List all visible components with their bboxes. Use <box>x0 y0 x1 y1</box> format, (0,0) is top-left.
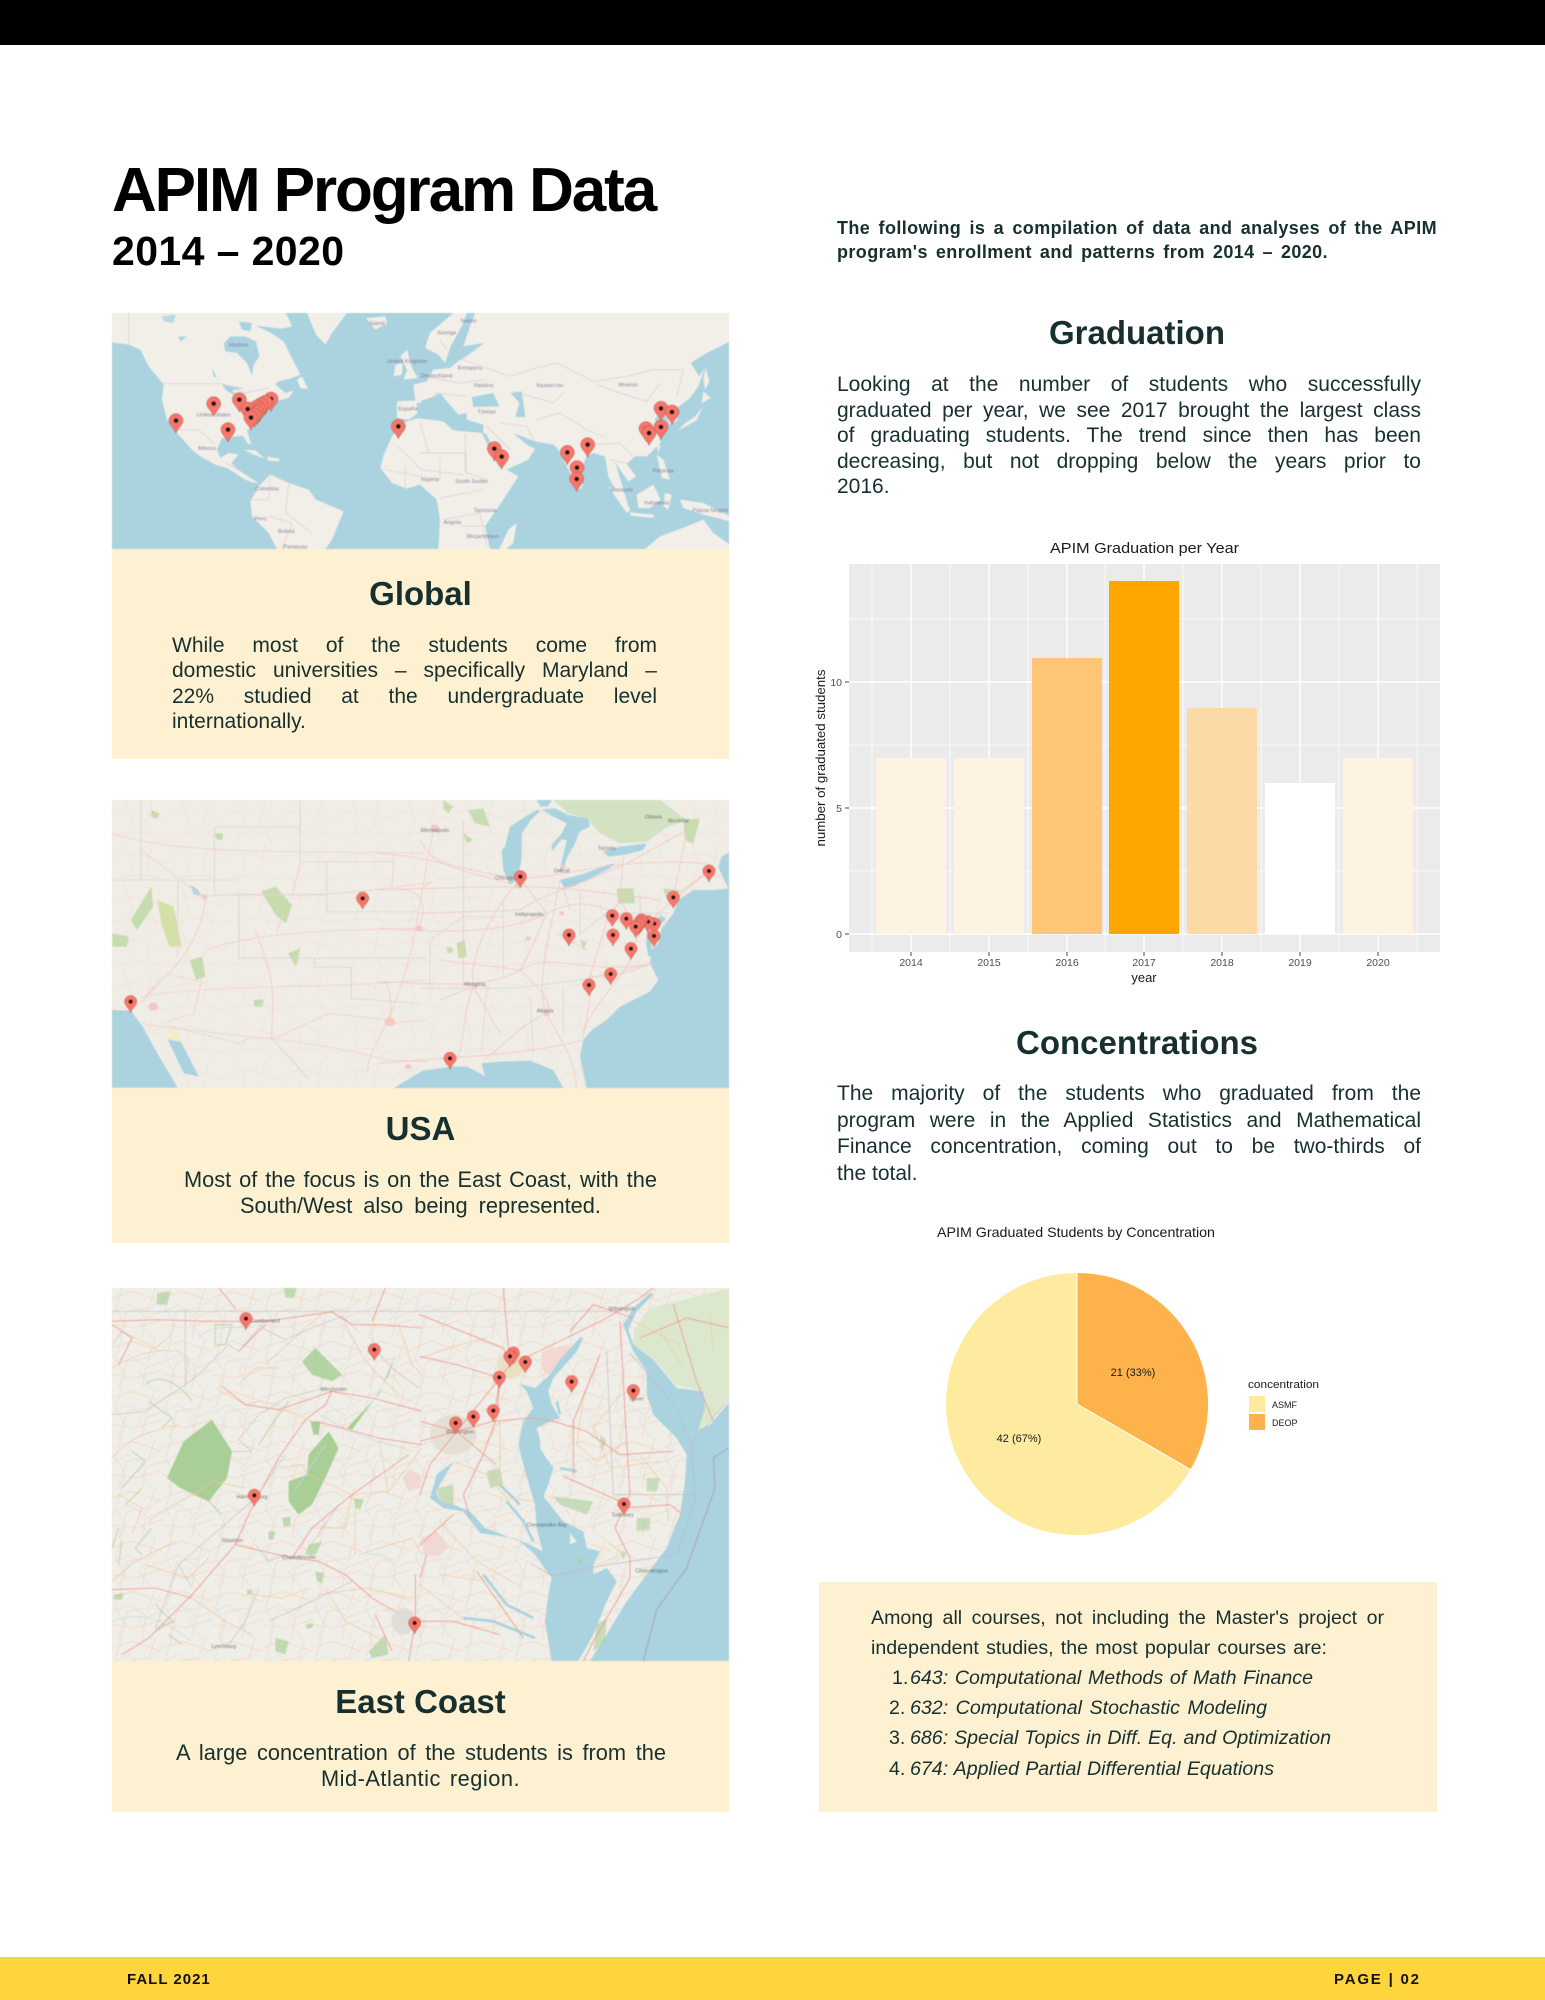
x axis labels: 2014 <box>899 957 923 969</box>
text: Graduation paragraph: graduated per year, we see 2017 brought the largest class <box>837 399 1421 422</box>
list: popular courses: 643: Computational Methods of Math Finance <box>910 1667 1313 1689</box>
map: USA: Toronto <box>598 846 616 852</box>
map: world: Suomi <box>460 318 476 324</box>
x axis labels: 2015 <box>977 957 1001 969</box>
bars <box>876 581 1413 934</box>
map: USA: Montréal <box>668 819 689 825</box>
map: world: Papua Niugini <box>692 508 728 514</box>
list: popular courses: 2. <box>889 1697 905 1719</box>
map: world: Indonesia <box>644 501 670 507</box>
title: APIM Program Data <box>112 156 655 225</box>
map: world: Монгол <box>619 382 638 388</box>
map: East Coast: Salisbury <box>612 1513 634 1519</box>
map: world: Perú <box>254 516 266 522</box>
text: Global description: internationally. <box>172 710 306 733</box>
map pins: USA <box>125 865 715 1069</box>
map: USA: Minneapolis <box>421 828 450 834</box>
footer bar <box>0 1957 1545 2000</box>
y axis title: number of graduated students <box>814 670 828 846</box>
footer left text: FALL 2021 <box>127 1971 211 1988</box>
map pins: world <box>169 392 679 492</box>
text: Graduation paragraph <box>837 373 1421 498</box>
panel: Global <box>112 313 729 759</box>
list: popular courses: 632: Computational Stochastic Modeling <box>910 1697 1267 1719</box>
legend: ASMF <box>1272 1400 1298 1410</box>
map: world: Malaysia <box>611 487 634 493</box>
map: world: Беларусь <box>458 366 482 372</box>
map: USA: Detroit <box>554 868 570 874</box>
map: world: Türkiye <box>477 409 496 415</box>
map: world: Bolivia <box>278 529 296 535</box>
text: USA description: Most of the focus is on the East Coast, with the <box>184 1167 657 1192</box>
x axis labels: 2019 <box>1288 957 1312 969</box>
map: East Coast: Harrisonburg <box>237 1495 267 1501</box>
map: USA: Memphis <box>464 982 486 988</box>
heading: Concentrations: Concentrations <box>1016 1024 1258 1061</box>
map: East Coast: Washington <box>446 1430 474 1436</box>
top black bar <box>0 0 1545 45</box>
panel: USA <box>112 800 729 1243</box>
map: USA <box>112 800 730 1088</box>
map: world: Україна <box>473 383 494 389</box>
list: popular courses: 4. <box>889 1758 905 1780</box>
chart title: APIM Graduated Students by Concentration <box>937 1224 1215 1240</box>
text: Global description <box>172 634 657 733</box>
x axis labels: 2018 <box>1210 957 1234 969</box>
text: Graduation paragraph: Looking at the number of students who successfully <box>837 373 1421 396</box>
text: USA description: South/West also being represented. <box>240 1193 601 1218</box>
legend <box>1248 1379 1319 1430</box>
map: East Coast: Chesapeake Bay <box>526 1522 567 1528</box>
text: Global description: 22% studied at the undergraduate level <box>172 685 657 708</box>
text: courses intro: independent studies, the most popular courses are: <box>871 1637 1327 1659</box>
map: world: Tanzania <box>474 508 497 514</box>
text: East Coast description: Mid-Atlantic region. <box>321 1766 520 1791</box>
pie slice: DEOP <box>1077 1272 1209 1470</box>
text: Global description: domestic universities – specifically Maryland – <box>172 659 657 682</box>
text: Concentrations paragraph: Finance concentration, coming out to be two-thirds of <box>837 1135 1421 1158</box>
map: USA: Ottawa <box>645 814 662 820</box>
x axis labels: 2020 <box>1366 957 1390 969</box>
y axis labels: 10 <box>830 677 842 689</box>
map: world: Ísland <box>369 320 385 327</box>
x axis labels: 2016 <box>1055 957 1079 969</box>
map: world: South Sudan <box>455 479 488 485</box>
intro text: program's enrollment and patterns from 2014 – 2020. <box>837 242 1328 262</box>
map: world: México <box>198 446 216 452</box>
list: popular courses <box>889 1667 1331 1780</box>
map: East Coast <box>112 1288 730 1662</box>
list: popular courses: 1. <box>892 1667 908 1689</box>
text: USA description <box>184 1167 657 1218</box>
map: East Coast: Staunton <box>221 1538 243 1544</box>
intro text <box>837 218 1437 262</box>
text: Concentrations paragraph: program were in the Applied Statistics and Mathematical <box>837 1109 1421 1132</box>
map: world: Pilipinas <box>653 468 674 474</box>
map: world: Moçambique <box>466 534 499 540</box>
bar chart: graduation per year <box>814 541 1440 985</box>
text: courses intro <box>871 1607 1384 1659</box>
x axis labels <box>899 957 1390 969</box>
map: world: Colombia <box>255 487 280 493</box>
pie label: ASMF: 42 (67%) <box>997 1433 1041 1445</box>
list: popular courses: 3. <box>889 1727 905 1749</box>
map: East Coast: Cumberland <box>251 1319 280 1325</box>
legend: DEOP <box>1272 1418 1298 1428</box>
list: popular courses: 674: Applied Partial Differential Equations <box>910 1758 1274 1780</box>
map: world: Hudson <box>229 342 248 348</box>
text: Concentrations paragraph <box>837 1082 1421 1185</box>
y axis labels: 0 <box>836 929 842 941</box>
chart title: APIM Graduation per Year <box>1050 541 1239 557</box>
text: East Coast description: A large concentration of the students is from the <box>176 1740 666 1765</box>
pie label: DEOP: 21 (33%) <box>1111 1367 1155 1379</box>
map: USA: Atlanta <box>537 1008 553 1014</box>
map: East Coast: Dover <box>630 1397 644 1403</box>
map: world: Deutschland <box>421 374 452 380</box>
map: East Coast: Lynchburg <box>211 1644 236 1650</box>
map: world: Sverige <box>437 330 456 336</box>
map: world: Nigeria <box>421 477 440 483</box>
text: Concentrations paragraph: The majority of the students who graduated from the <box>837 1082 1421 1105</box>
map: world: Казахстан <box>537 383 563 389</box>
map pins: East Coast <box>240 1313 639 1634</box>
heading: Global: Global <box>369 575 472 612</box>
legend: concentration <box>1248 1379 1319 1391</box>
y axis labels <box>830 677 842 941</box>
x axis title: year <box>1131 970 1157 985</box>
map: East Coast: Charlottesville <box>282 1555 315 1561</box>
map: world <box>112 312 730 550</box>
heading: East Coast: East Coast <box>335 1683 506 1720</box>
panel: popular courses <box>819 1582 1437 1812</box>
map: world: United States <box>197 412 231 418</box>
map: East Coast: Wilmington <box>608 1307 635 1313</box>
x axis labels: 2017 <box>1132 957 1156 969</box>
subtitle: 2014 – 2020 <box>112 228 344 274</box>
heading: Graduation: Graduation <box>1049 314 1225 351</box>
text: Graduation paragraph: of graduating students. The trend since then has been <box>837 424 1421 447</box>
intro text: The following is a compilation of data and analyses of the APIM <box>837 218 1437 238</box>
y axis labels: 5 <box>836 803 842 815</box>
map: East Coast: Chincoteague <box>635 1568 668 1574</box>
text: Graduation paragraph: decreasing, but not dropping below the years prior to <box>837 450 1421 473</box>
map: world: Angola <box>444 520 462 526</box>
text: Global description: While most of the students come from <box>172 634 657 657</box>
pie slice: ASMF <box>946 1272 1191 1536</box>
map: USA: Chicago <box>495 875 515 881</box>
heading: USA: USA <box>386 1110 455 1147</box>
footer right text: PAGE | 02 <box>1334 1971 1421 1988</box>
map: East Coast: Winchester <box>320 1387 347 1393</box>
panel: East Coast <box>112 1288 729 1812</box>
map: world: España <box>398 407 418 413</box>
text: East Coast description <box>176 1740 666 1791</box>
text: Concentrations paragraph: the total. <box>837 1162 918 1185</box>
text: Graduation paragraph: 2016. <box>837 475 890 498</box>
map: world: United Kingdom <box>387 359 427 365</box>
list: popular courses: 686: Special Topics in Diff. Eq. and Optimization <box>910 1727 1331 1749</box>
pie chart: graduates by concentration <box>937 1224 1319 1535</box>
map: USA: Indianapolis <box>515 912 544 918</box>
text: courses intro: Among all courses, not including the Master's project or <box>871 1607 1384 1629</box>
